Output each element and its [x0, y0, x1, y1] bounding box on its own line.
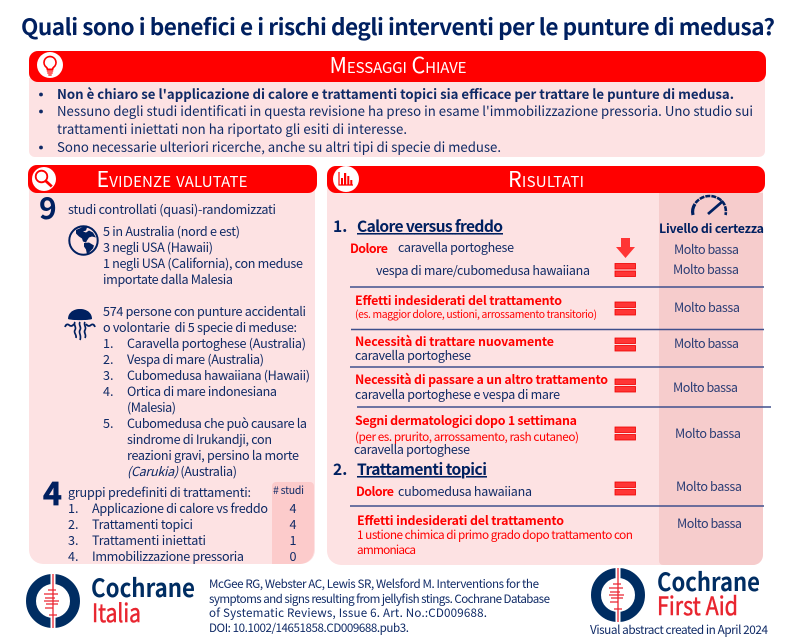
- results heading: Risultati: [508, 163, 584, 194]
- participants and species: 574 persone con punture accidentali: [103, 301, 306, 320]
- section 1 heading: 1.: [333, 215, 347, 237]
- row: dermatological signs: (per es. prurito, arrossamento, rash cutaneo): [355, 428, 579, 445]
- key message bullets: [39, 84, 753, 156]
- icon: bar chart: [333, 166, 359, 192]
- citation: of Systematic Reviews, Issue 6. Art. No.:CD009688.: [209, 605, 487, 621]
- key message bullets: trattamenti iniettati non ha riportato gli esiti di interesse.: [57, 119, 407, 138]
- logo: Cochrane Italia: Italia: [92, 594, 141, 630]
- treatment groups: Trattamenti topici: [92, 514, 193, 533]
- participants and species: (Carukia) (Australia): [127, 461, 237, 480]
- icon: Cochrane ring: [596, 567, 640, 623]
- row: pain, box jellyfish: vespa di mare/cubomedusa hawaiiana: [376, 260, 590, 279]
- row: need to retreat: caravella portoghese: [355, 345, 471, 364]
- icon: no difference: [615, 482, 636, 495]
- treatment groups: 1: [290, 530, 296, 549]
- row: adverse effects: Effetti indesiderati del trattamento: [355, 291, 562, 309]
- citation: symptoms and signs resulting from jellyfish stings. Cochrane Database: [209, 591, 550, 607]
- treatment groups: 3.: [68, 530, 78, 549]
- participants and species: 4.: [103, 381, 114, 400]
- treatment groups: 2.: [68, 514, 78, 533]
- number of studies: 9: [39, 184, 57, 228]
- logo: Cochrane First Aid: Cochrane: [657, 563, 760, 599]
- participants and species: Cubomedusa che può causare la: [127, 413, 307, 432]
- row: dermatological signs: Molto bassa: [675, 423, 741, 442]
- treatment groups: Trattamenti iniettati: [92, 530, 206, 549]
- participants and species: Ortica di mare indonesiana: [127, 381, 277, 400]
- creation note: Visual abstract created in April 2024: [590, 621, 768, 638]
- citation: McGee RG, Webster AC, Lewis SR, Welsford M. Interventions for the: [209, 576, 539, 592]
- logo: Cochrane First Aid: First Aid: [657, 587, 738, 623]
- participants and species: 3.: [103, 365, 114, 384]
- participants and species: reazioni gravi, persino la morte: [127, 445, 299, 464]
- row: adverse effects: (es. maggior dolore, ustioni, arrossamento transitorio): [355, 306, 597, 321]
- icon: jellyfish: [65, 309, 95, 340]
- row: pain, portuguese man o' war: [350, 237, 739, 258]
- treatment groups: 1.: [68, 498, 78, 517]
- participants and species: 5.: [103, 413, 114, 432]
- key messages heading: Messaggi Chiave: [330, 49, 466, 80]
- row: topical pain: [356, 476, 742, 500]
- participants and species: Vespa di mare (Australia): [127, 349, 264, 368]
- row: topical pain: Dolore: [356, 482, 394, 500]
- key message bullets: Sono necessarie ulteriori ricerche, anche su altri tipi di specie di meduse.: [57, 137, 501, 156]
- row: topical adverse effects: Molto bassa: [677, 513, 742, 532]
- logo: Cochrane Italia: Cochrane: [91, 569, 195, 605]
- section 2 heading: Trattamenti topici: [357, 458, 487, 480]
- study locations: importate dalla Malesia: [103, 269, 233, 288]
- citation: [209, 576, 550, 636]
- key message bullets: Non è chiaro se l'applicazione di calore e trattamenti topici sia efficace per trattare le punture di medusa.: [57, 84, 734, 103]
- row: dermatological signs: Segni dermatologici dopo 1 settimana: [355, 411, 577, 429]
- panel: evidence assessed: [28, 163, 317, 565]
- row: pain, box jellyfish: Molto bassa: [673, 259, 739, 278]
- participants and species: 2.: [103, 349, 114, 368]
- icon: light bulb: [37, 52, 63, 78]
- row: adverse effects: [355, 291, 740, 321]
- participants and species: 1.: [103, 333, 114, 352]
- treatment groups: 0: [290, 546, 296, 565]
- row: need to change treatment: caravella portoghese e vespa di mare: [355, 384, 560, 403]
- logo: Cochrane First Aid: [596, 563, 760, 623]
- row: dermatological signs: caravella portoghese: [354, 439, 470, 458]
- row: need to change treatment: Molto bassa: [673, 377, 738, 396]
- participants and species: o volontarie di 5 specie di meduse:: [103, 317, 297, 336]
- row: pain, portuguese man o' war: Dolore: [350, 239, 388, 257]
- certainty column: [659, 193, 763, 565]
- treatment groups: [43, 469, 304, 565]
- row: need to retreat: Molto bassa: [674, 333, 739, 352]
- key message bullets: Nessuno degli studi identificati in questa revisione ha preso in esame l'immobilizzazione pressoria. Uno studio sui: [57, 101, 753, 120]
- icon: magnifying glass: [32, 167, 56, 191]
- study locations: 5 in Australia (nord e est): [103, 221, 240, 240]
- row: topical adverse effects: [357, 511, 742, 558]
- results header bar: [327, 166, 765, 193]
- participants and species: Caravella portoghese (Australia): [127, 333, 306, 352]
- evidence header bar: [28, 165, 317, 193]
- treatment groups: Immobilizzazione pressoria: [92, 546, 244, 565]
- icon: globe: [69, 226, 98, 255]
- row: topical adverse effects: 1 ustione chimica di primo grado dopo trattamento con: [357, 526, 633, 543]
- studies count column: [272, 482, 314, 564]
- row: pain, portuguese man o' war: Molto bassa: [674, 239, 739, 258]
- number of studies: [39, 184, 276, 228]
- icon: no difference: [615, 427, 636, 440]
- participants and species: (Malesia): [127, 397, 176, 416]
- row: pain, box jellyfish: [376, 259, 739, 279]
- icon: no difference: [615, 379, 636, 392]
- icon: no difference: [615, 302, 636, 315]
- treatment groups: 4: [43, 469, 62, 515]
- row: need to change treatment: [355, 370, 738, 403]
- treatment groups: 4: [290, 498, 296, 517]
- logo: Cochrane Italia: [31, 569, 195, 630]
- treatment groups: 4: [290, 514, 296, 533]
- icon: Cochrane ring: [31, 573, 75, 629]
- panel: results: [327, 163, 771, 565]
- section 2 heading: 2.: [333, 458, 347, 480]
- row: adverse effects: Molto bassa: [674, 297, 740, 316]
- row: topical adverse effects: Effetti indesiderati del trattamento: [357, 511, 564, 529]
- participants and species: Cubomedusa hawaiiana (Hawaii): [127, 365, 310, 384]
- row: need to retreat: Necessità di trattare nuovamente: [355, 332, 554, 350]
- evidence heading: Evidenze valutate: [96, 163, 248, 194]
- row: topical adverse effects: ammoniaca: [357, 541, 416, 558]
- icon: no difference: [615, 264, 636, 276]
- treatment groups: gruppi predefiniti di trattamenti:: [68, 482, 251, 501]
- row: need to change treatment: Necessità di passare a un altro trattamento: [355, 370, 608, 388]
- key messages header bar: [29, 51, 766, 82]
- icon: gauge: [693, 196, 726, 215]
- row: topical pain: Molto bassa: [676, 476, 742, 495]
- certainty heading: Livello di certezza: [659, 219, 764, 237]
- row: need to retreat: [355, 332, 739, 364]
- citation: DOI: 10.1002/14651858.CD009688.pub3.: [209, 620, 409, 636]
- row: dermatological signs: [354, 411, 741, 458]
- treatment groups: # studi: [273, 483, 304, 498]
- participants and species: sindrome di Irukandji, con: [127, 429, 272, 448]
- study locations: [103, 221, 303, 288]
- panel: key messages: [29, 49, 766, 157]
- treatment groups: 4.: [68, 546, 78, 565]
- row: topical pain: cubomedusa hawaiiana: [398, 481, 532, 500]
- title: Quali sono i benefici e i rischi degli interventi per le punture di medusa?: [21, 9, 775, 42]
- icon: no difference: [615, 338, 636, 351]
- number of studies: studi controllati (quasi)-randomizzati: [68, 199, 276, 218]
- participants and species: [103, 301, 310, 480]
- treatment groups: Applicazione di calore vs freddo: [92, 498, 268, 517]
- study locations: 1 negli USA (California), con meduse: [103, 253, 303, 272]
- row: pain, portuguese man o' war: caravella portoghese: [398, 237, 514, 256]
- study locations: 3 negli USA (Hawaii): [103, 237, 213, 256]
- section 1 heading: Calore versus freddo: [357, 215, 503, 237]
- icon: down arrow: [616, 238, 635, 258]
